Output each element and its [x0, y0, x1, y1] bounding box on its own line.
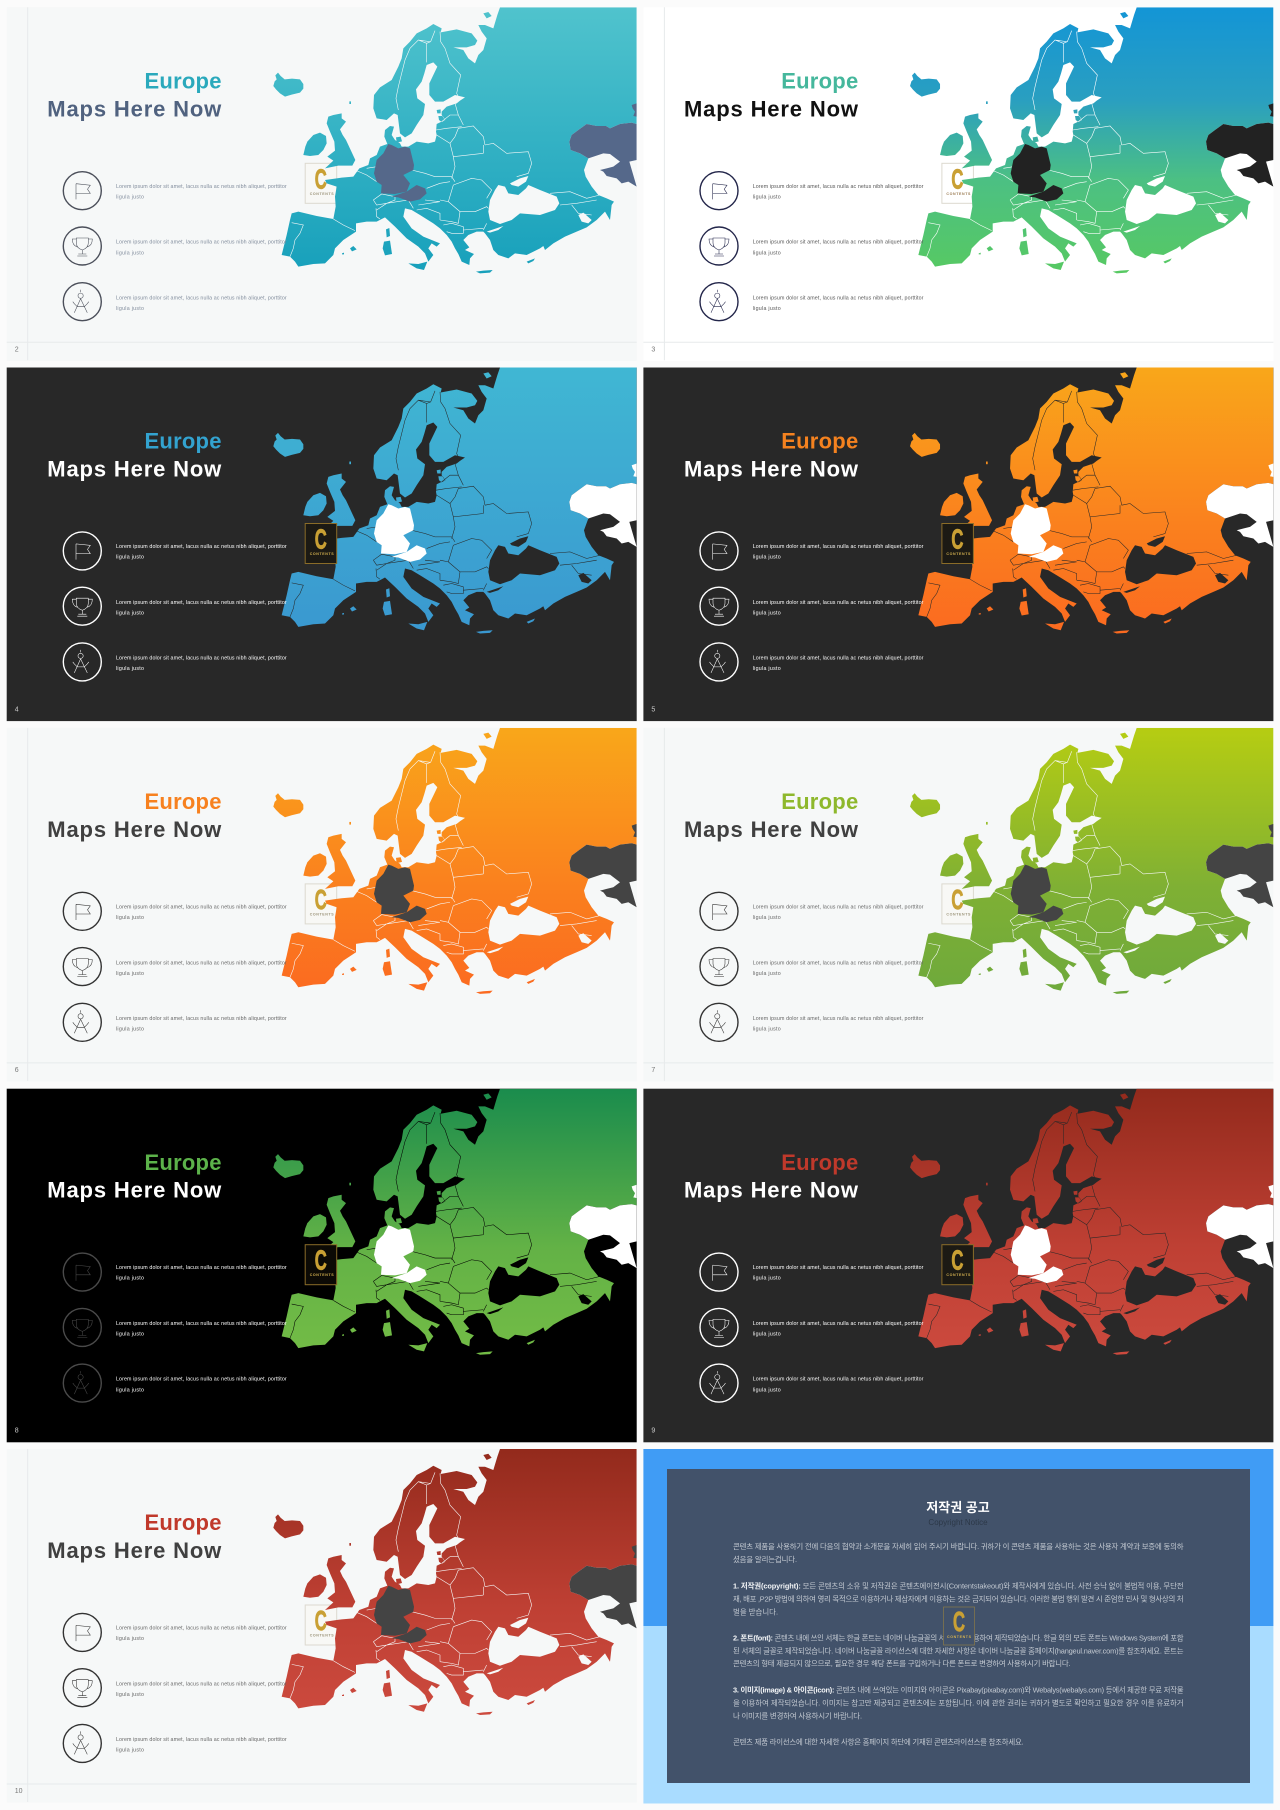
text block 3	[116, 295, 287, 312]
logo watermark: CONTENTS	[310, 552, 334, 556]
page number: 9	[651, 1428, 655, 1435]
logo watermark: C	[315, 1605, 327, 1636]
text block 1: Lorem ipsum dolor sit amet, lacus nulla ac netus nibh aliquet, porttitor	[116, 904, 287, 910]
title: Maps Here Now	[47, 96, 222, 121]
text block 1	[116, 1265, 287, 1282]
page number: 2	[15, 346, 19, 353]
text block 1	[753, 544, 924, 560]
map of Europe	[273, 1089, 637, 1355]
title: Europe	[145, 789, 222, 814]
text block 1	[116, 904, 287, 921]
title	[684, 789, 859, 842]
logo watermark: CONTENTS	[310, 1634, 334, 1638]
text block 2: Lorem ipsum dolor sit amet, lacus nulla ac netus nibh aliquet, porttitor	[116, 240, 287, 246]
notice body text	[733, 1542, 1184, 1746]
page number: 8	[15, 1428, 19, 1435]
logo watermark	[942, 884, 973, 924]
logo watermark: C	[315, 524, 327, 554]
text block 3: Lorem ipsum dolor sit amet, lacus nulla ac netus nibh aliquet, porttitor	[116, 1016, 287, 1022]
title	[47, 68, 222, 121]
text block 3: ligula justo	[116, 306, 144, 312]
logo watermark: CONTENTS	[946, 552, 971, 556]
map of Europe	[273, 7, 637, 273]
icon: trophy	[63, 1669, 101, 1707]
title: Europe	[781, 1150, 858, 1175]
title: Europe	[145, 1150, 222, 1175]
icon: trophy	[63, 948, 101, 986]
page number: 5	[651, 706, 655, 714]
logo watermark: CONTENTS	[310, 192, 334, 196]
text block 2	[116, 240, 287, 256]
title	[684, 429, 859, 482]
title: Europe	[781, 68, 858, 93]
text block 1: Lorem ipsum dolor sit amet, lacus nulla ac netus nibh aliquet, porttitor	[753, 544, 924, 550]
text block 1	[116, 1626, 287, 1642]
icon: compass	[63, 643, 101, 681]
logo watermark: C	[315, 884, 327, 915]
page number: 7	[651, 1067, 655, 1074]
logo watermark: C	[951, 524, 963, 554]
icon: trophy	[700, 227, 738, 265]
text block 1: ligula justo	[753, 915, 781, 921]
text block 2	[116, 600, 287, 616]
icon: compass	[63, 1364, 101, 1402]
logo watermark: CONTENTS	[310, 912, 334, 916]
map of Europe	[910, 368, 1273, 634]
notice subheading: Copyright Notice	[928, 1518, 988, 1527]
text block 1: Lorem ipsum dolor sit amet, lacus nulla ac netus nibh aliquet, porttitor	[753, 184, 924, 190]
icon: compass	[700, 1003, 738, 1041]
text block 3: ligula justo	[753, 306, 781, 312]
slide 9: red on light	[7, 1449, 637, 1803]
text block 2	[116, 1681, 287, 1698]
title: Maps Here Now	[684, 96, 859, 121]
text block 2: ligula justo	[753, 250, 781, 256]
page number: 3	[651, 346, 655, 353]
text block 3: Lorem ipsum dolor sit amet, lacus nulla ac netus nibh aliquet, porttitor	[753, 1016, 924, 1022]
logo watermark	[305, 884, 337, 924]
title	[47, 789, 222, 842]
text block 2: Lorem ipsum dolor sit amet, lacus nulla ac netus nibh aliquet, porttitor	[116, 960, 287, 966]
title	[47, 1510, 222, 1563]
text block 1: Lorem ipsum dolor sit amet, lacus nulla ac netus nibh aliquet, porttitor	[753, 904, 924, 910]
notice body text: 3. 이미지(image) & 아이콘(icon): 콘텐츠 내에 쓰여있는 이미지와 아이콘은 Pixabay(pixabay.com)와 Webalys(webalys.com) 등에서 제공한 무료 저작물	[733, 1686, 1184, 1694]
text block 1: Lorem ipsum dolor sit amet, lacus nulla ac netus nibh aliquet, porttitor	[116, 1626, 287, 1632]
page number: 4	[15, 706, 19, 714]
text block 1	[116, 184, 287, 200]
text block 2: ligula justo	[753, 610, 781, 616]
icon: flag	[63, 892, 101, 930]
slide 6: lime on light	[643, 728, 1273, 1082]
text block 2	[116, 960, 287, 977]
page number: 6	[15, 1067, 19, 1074]
map of Europe	[910, 1089, 1273, 1355]
slide 3: blue on dark	[7, 368, 637, 721]
icon: trophy	[63, 1308, 101, 1346]
notice body text: 벌을 받습니다.	[733, 1608, 778, 1616]
notice body text: 콘텐츠 제품을 사용하기 전에 다음의 협약과 소개문을 자세히 읽어 주시기 바랍니다. 귀하가 이 콘텐츠 제품을 사용하는 것은 사용자 계약과 보증에 동의하	[733, 1542, 1184, 1551]
title	[47, 429, 222, 482]
logo watermark	[305, 1605, 337, 1645]
text block 3: ligula justo	[116, 666, 144, 672]
text block 3	[753, 1016, 924, 1033]
logo watermark: C	[951, 163, 963, 194]
text block 3: Lorem ipsum dolor sit amet, lacus nulla ac netus nibh aliquet, porttitor	[116, 295, 287, 301]
text block 3	[116, 1377, 287, 1393]
text block 2: ligula justo	[116, 971, 144, 977]
map of Europe	[273, 368, 637, 634]
slide 5: orange on light	[7, 728, 637, 1082]
icon: flag	[63, 1613, 101, 1651]
text block 2: Lorem ipsum dolor sit amet, lacus nulla ac netus nibh aliquet, porttitor	[116, 600, 287, 606]
logo watermark	[305, 524, 337, 564]
map of Europe	[910, 7, 1273, 273]
text block 1: Lorem ipsum dolor sit amet, lacus nulla ac netus nibh aliquet, porttitor	[116, 184, 287, 190]
text block 2: ligula justo	[753, 971, 781, 977]
text block 3: Lorem ipsum dolor sit amet, lacus nulla ac netus nibh aliquet, porttitor	[116, 1737, 287, 1743]
text block 1: ligula justo	[116, 1636, 144, 1642]
logo watermark: CONTENTS	[310, 1273, 334, 1277]
slide 4: orange on dark	[643, 368, 1273, 721]
notice body text: 된 서체의 글꼴로 제작되었습니다. 네이버 나눔글꼴 라이선스에 대한 자세한 사항은 네이버 나눔글꼴 홈페이지(hangeul.naver.com)를 참조하세요. 폰트는	[733, 1646, 1184, 1656]
notice body text: 재, 배포 ,P2P 방법에 의하여 영리 목적으로 이용하거나 제삼자에게 이용하는 것은 금지되어 있습니다. 이러한 불법 행위 발견 시 준엄한 민사 및 형사상의 처	[733, 1594, 1184, 1604]
text block 2: Lorem ipsum dolor sit amet, lacus nulla ac netus nibh aliquet, porttitor	[116, 1681, 287, 1687]
text block 3: ligula justo	[116, 1027, 144, 1033]
title: Europe	[145, 429, 222, 454]
icon: compass	[700, 283, 738, 321]
title: Maps Here Now	[684, 1178, 859, 1203]
text block 1: ligula justo	[116, 915, 144, 921]
icon: trophy	[700, 948, 738, 986]
text block 3: Lorem ipsum dolor sit amet, lacus nulla ac netus nibh aliquet, porttitor	[116, 656, 287, 662]
text block 2: ligula justo	[116, 1692, 144, 1698]
slide 8: red on dark	[643, 1089, 1273, 1442]
title	[684, 68, 859, 121]
title	[47, 1150, 222, 1203]
title: Maps Here Now	[47, 1178, 222, 1203]
text block 3: ligula justo	[753, 666, 781, 672]
text block 2: ligula justo	[116, 610, 144, 616]
text block 2: Lorem ipsum dolor sit amet, lacus nulla ac netus nibh aliquet, porttitor	[753, 1321, 924, 1327]
text block 1	[753, 184, 924, 200]
text block 2	[753, 1321, 924, 1338]
icon: compass	[700, 643, 738, 681]
logo watermark: CONTENTS	[946, 1273, 971, 1277]
text block 1: ligula justo	[116, 194, 144, 200]
page number: 10	[15, 1788, 23, 1795]
logo watermark	[942, 1245, 973, 1285]
notice body text: 콘텐츠 제품 라이선스에 대한 자세한 사항은 홈페이지 하단에 기재된 콘텐츠라이선스를 참조하세요.	[733, 1738, 1024, 1746]
title: Maps Here Now	[47, 456, 222, 482]
text block 3	[753, 1377, 924, 1393]
text block 2	[753, 960, 924, 977]
notice heading: 저작권 공고	[926, 1500, 990, 1515]
text block 1	[116, 544, 287, 560]
text block 3: Lorem ipsum dolor sit amet, lacus nulla ac netus nibh aliquet, porttitor	[753, 1377, 924, 1383]
text block 3	[753, 295, 924, 312]
notice body text: 셨음을 알리는겁니다.	[733, 1555, 797, 1564]
map of Europe	[910, 728, 1273, 994]
notice body text: 을 이용하여 제작되었습니다. 이미지는 참고만 제공되고 콘텐츠에는 포함됩니다. 이에 관한 권리는 귀하가 별도로 확인하고 필요한 경우 이를 유료하거	[733, 1698, 1184, 1708]
title: Maps Here Now	[47, 817, 222, 842]
text block 3	[116, 1016, 287, 1033]
notice body text: 콘텐츠의 형태 제공되지 않으므로, 필요한 경우 해당 폰트를 구입하거나 다른 폰트로 변경하여 사용하시기 바랍니다.	[733, 1659, 1070, 1668]
text block 2	[753, 600, 924, 616]
text block 3	[116, 1737, 287, 1754]
logo watermark	[305, 1245, 337, 1285]
text block 1: ligula justo	[753, 554, 781, 560]
text block 1: ligula justo	[116, 554, 144, 560]
icon: trophy	[700, 587, 738, 625]
text block 2: ligula justo	[116, 250, 144, 256]
icon: flag	[700, 532, 738, 570]
logo watermark: CONTENTS	[946, 192, 971, 196]
notice body text: 1. 저작권(copyright): 모든 콘텐츠의 소유 및 저작권은 콘텐츠에이전시(Contentstakeout)와 제작사에게 있습니다. 사전 승낙 없이 불법적 이용, 무단전	[733, 1582, 1184, 1590]
icon: trophy	[63, 587, 101, 625]
notice body text: 2. 폰트(font): 콘텐츠 내에 쓰인 서체는 한글 폰트는 네이버 나눔글꼴의 서체들을 이용하여 제작되었습니다. 한글 외의 모든 폰트는 Windows System에 포함	[733, 1634, 1184, 1642]
text block 2: Lorem ipsum dolor sit amet, lacus nulla ac netus nibh aliquet, porttitor	[753, 600, 924, 606]
text block 3: ligula justo	[116, 1387, 144, 1393]
text block 3: ligula justo	[116, 1748, 144, 1754]
icon: flag	[700, 172, 738, 210]
text block 3: Lorem ipsum dolor sit amet, lacus nulla ac netus nibh aliquet, porttitor	[753, 295, 924, 301]
text block 1: Lorem ipsum dolor sit amet, lacus nulla ac netus nibh aliquet, porttitor	[753, 1265, 924, 1271]
text block 2	[116, 1321, 287, 1338]
text block 3	[753, 656, 924, 672]
icon: flag	[63, 532, 101, 570]
notice body text: 나 이미지를 변경하여 사용하시기 바랍니다.	[733, 1712, 862, 1720]
text block 2: ligula justo	[116, 1332, 144, 1338]
logo watermark	[942, 524, 973, 564]
logo watermark	[942, 163, 973, 203]
icon: trophy	[700, 1308, 738, 1346]
title: Europe	[145, 1510, 222, 1535]
title: Europe	[145, 68, 222, 93]
slide 10: copyright notice	[643, 1449, 1273, 1804]
logo watermark	[944, 1606, 974, 1645]
text block 3: Lorem ipsum dolor sit amet, lacus nulla ac netus nibh aliquet, porttitor	[753, 656, 924, 662]
logo watermark: CONTENTS	[947, 1635, 972, 1639]
slide 1: teal on light	[7, 7, 637, 361]
icon: compass	[63, 1724, 101, 1762]
text block 2: Lorem ipsum dolor sit amet, lacus nulla ac netus nibh aliquet, porttitor	[753, 960, 924, 966]
text block 2: ligula justo	[753, 1332, 781, 1338]
logo watermark: C	[951, 884, 963, 915]
icon: trophy	[63, 227, 101, 265]
text block 2	[753, 240, 924, 256]
map of Europe	[273, 728, 637, 994]
logo watermark: C	[315, 163, 327, 194]
icon: flag	[700, 1253, 738, 1291]
text block 3: Lorem ipsum dolor sit amet, lacus nulla ac netus nibh aliquet, porttitor	[116, 1377, 287, 1383]
icon: flag	[63, 172, 101, 210]
title: Maps Here Now	[684, 817, 859, 842]
logo watermark: C	[951, 1245, 963, 1276]
text block 1: ligula justo	[753, 194, 781, 200]
icon: flag	[63, 1253, 101, 1291]
logo watermark: C	[315, 1245, 327, 1276]
map of Europe	[273, 1449, 637, 1715]
text block 1	[753, 904, 924, 921]
logo watermark: C	[953, 1606, 965, 1637]
slide 7: green on black	[7, 1089, 637, 1442]
text block 3: ligula justo	[753, 1027, 781, 1033]
icon: compass	[700, 1364, 738, 1402]
icon: compass	[63, 1003, 101, 1041]
icon: compass	[63, 283, 101, 321]
slide 2: blue-green on white	[643, 7, 1273, 361]
text block 1: Lorem ipsum dolor sit amet, lacus nulla ac netus nibh aliquet, porttitor	[116, 1265, 287, 1271]
title: Europe	[781, 789, 858, 814]
title: Maps Here Now	[47, 1538, 222, 1563]
text block 3	[116, 656, 287, 672]
title	[684, 1150, 859, 1203]
text block 2: Lorem ipsum dolor sit amet, lacus nulla ac netus nibh aliquet, porttitor	[753, 240, 924, 246]
text block 2: Lorem ipsum dolor sit amet, lacus nulla ac netus nibh aliquet, porttitor	[116, 1321, 287, 1327]
logo watermark: CONTENTS	[946, 912, 971, 916]
title: Europe	[781, 429, 858, 454]
text block 1: ligula justo	[753, 1276, 781, 1282]
logo watermark	[305, 163, 337, 203]
icon: flag	[700, 892, 738, 930]
text block 1	[753, 1265, 924, 1282]
text block 3: ligula justo	[753, 1387, 781, 1393]
text block 1: Lorem ipsum dolor sit amet, lacus nulla ac netus nibh aliquet, porttitor	[116, 544, 287, 550]
title: Maps Here Now	[684, 456, 859, 482]
text block 1: ligula justo	[116, 1276, 144, 1282]
